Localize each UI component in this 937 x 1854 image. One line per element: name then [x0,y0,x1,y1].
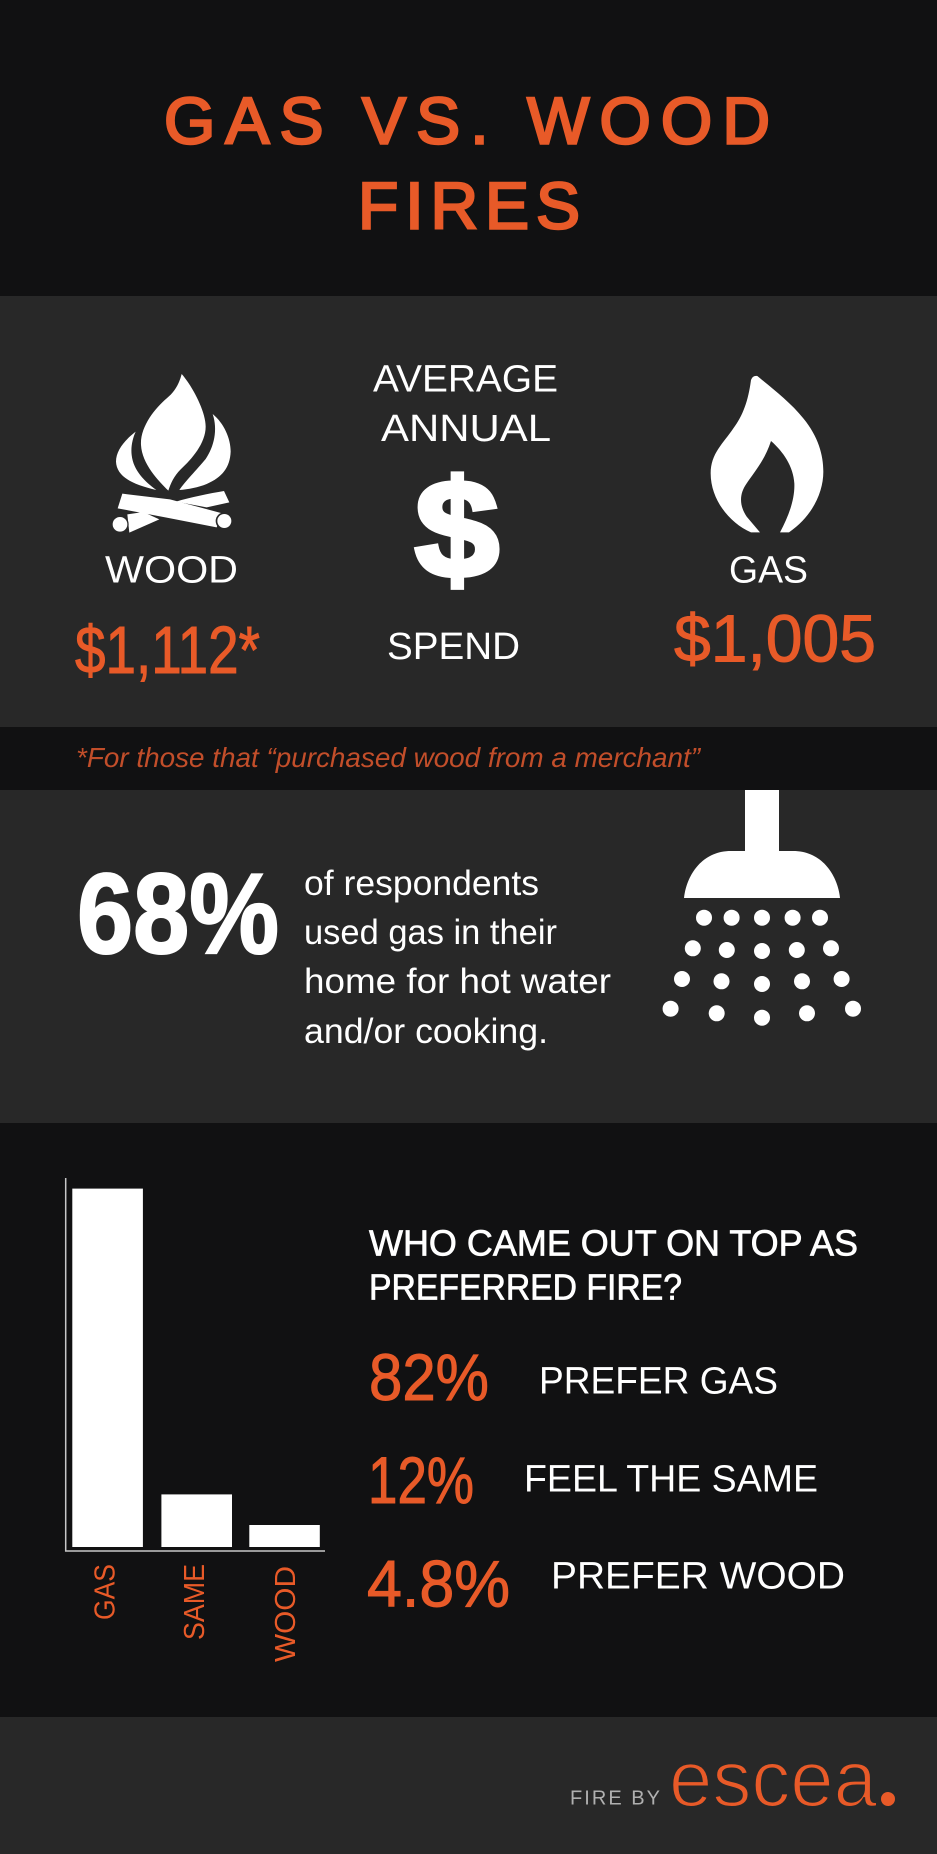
axis label: same: SAME [179,1564,211,1640]
panel: title band [0,0,937,296]
bar: wood [249,1525,320,1547]
stat: 4.8% prefer wood: 4.8% [367,1546,510,1620]
axis label: gas: GAS [90,1564,122,1620]
label: wood: WOOD [105,550,238,592]
heading: preferred fire [369,1222,858,1308]
bar: same [161,1494,232,1547]
bar chart [66,1178,325,1662]
title: GAS VS. WOOD [164,84,770,158]
heading: average annual [373,359,558,450]
heading: average annual: AVERAGE [373,359,558,401]
text block: respondents: of respondents [304,864,539,903]
brand logo: FIRE BY [570,1788,660,1810]
stat: 4.8% prefer wood [367,1546,845,1620]
stat: 82% prefer gas: 82% [369,1340,489,1414]
icon: gas flame [711,376,823,532]
stat: 12% feel the same [368,1443,818,1517]
stat: 68%: 68% [77,851,279,978]
stat: 82% prefer gas: PREFER GAS [539,1360,778,1402]
text block: respondents [304,864,611,1051]
stat: 82% prefer gas [369,1340,778,1414]
panel: preferred fire [0,1123,937,1717]
text block: respondents: used gas in their [304,913,557,952]
panel: average annual spend [0,296,937,727]
icon: dollar sign: $ [415,452,499,607]
wood spend value: $1,112* [75,613,260,688]
panel: footer [0,1717,937,1854]
brand logo [570,1734,895,1823]
label: spend: SPEND [387,626,520,668]
text block: respondents: and/or cooking. [304,1012,548,1051]
icon: campfire [111,374,233,533]
stat: 4.8% prefer wood: PREFER WOOD [551,1556,845,1598]
panel: hot water and cooking [0,790,937,1123]
heading: preferred fire: WHO CAME OUT ON TOP AS [369,1222,858,1264]
text block: respondents: home for hot water [304,962,611,1001]
stat: 12% feel the same: FEEL THE SAME [524,1458,818,1500]
heading: preferred fire: PREFERRED FIRE? [369,1266,682,1308]
title [164,84,770,243]
icon: shower head [663,790,861,1026]
heading: average annual: ANNUAL [381,408,551,450]
footnote: *For those that “purchased wood from a merchant” [76,742,702,773]
bar: gas [72,1189,143,1547]
panel: footnote band [0,727,937,790]
stat: 12% feel the same: 12% [368,1443,474,1517]
label: gas: GAS [729,550,808,592]
axis label: wood: WOOD [270,1566,302,1662]
brand logo: escea [669,1734,877,1823]
gas spend value: $1,005 [674,602,876,677]
title: FIRES [358,169,580,243]
